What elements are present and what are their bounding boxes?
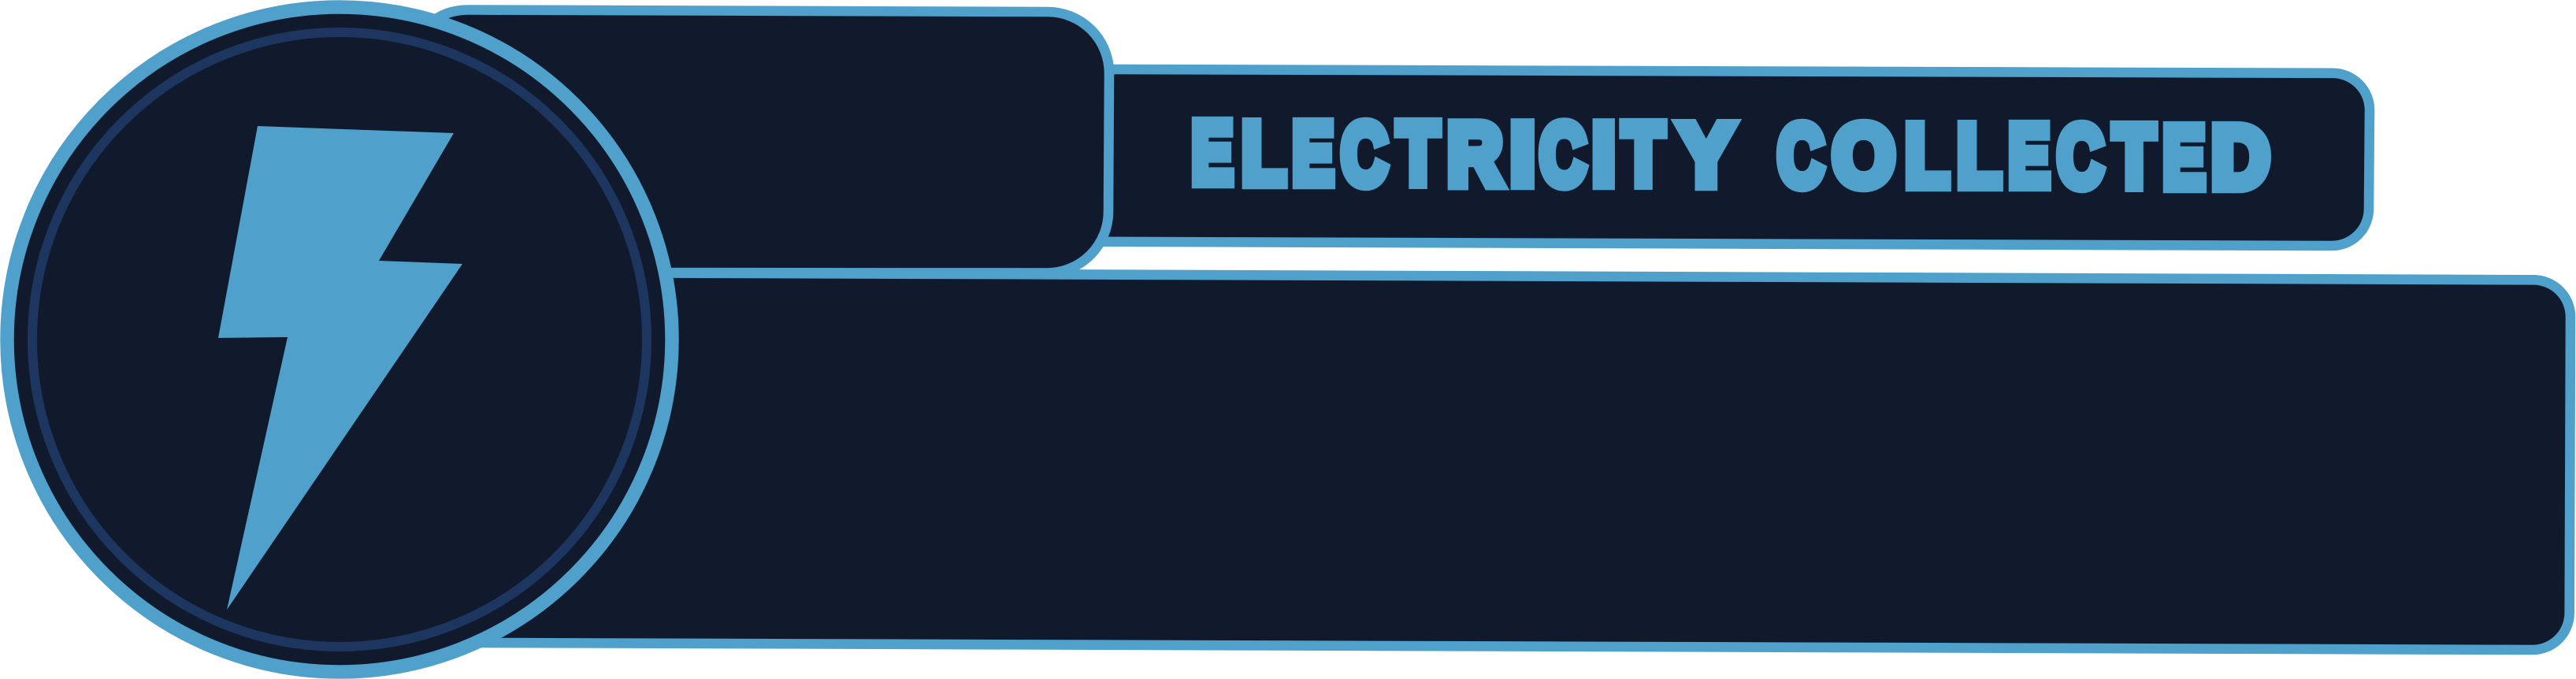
panel: title bar [1024, 69, 2370, 246]
title: electricity collected: R [1448, 106, 1502, 203]
title: electricity collected: T [2114, 108, 2155, 206]
title: electricity collected: T [1397, 105, 1438, 202]
title: electricity collected: E [1293, 105, 1334, 202]
icon: lightning bolt [218, 126, 462, 610]
icon badge: circle with lightning bolt [7, 7, 672, 672]
title: electricity collected: C [1342, 106, 1387, 203]
title: electricity collected: C [1778, 107, 1824, 205]
title: electricity collected: E [2009, 107, 2050, 205]
title: electricity collected: L [1957, 107, 2001, 205]
title: electricity collected: L [1905, 107, 1949, 205]
badge outer circle [7, 7, 672, 672]
title: electricity collected: T [1623, 106, 1664, 203]
title: electricity collected: I [1592, 106, 1615, 203]
title: electricity collected: L [1242, 105, 1286, 202]
title: electricity collected: D [2211, 109, 2270, 206]
title: electricity collected: O [1832, 107, 1895, 205]
title: electricity collected [1192, 104, 2270, 206]
title: electricity collected: E [1192, 104, 1233, 202]
title: electricity collected: C [1540, 106, 1586, 204]
badge inner ring [32, 32, 647, 647]
title: electricity collected: C [2058, 108, 2103, 206]
panel: top left tab [410, 9, 1109, 273]
panel: large content panel [441, 273, 2570, 650]
title: electricity collected: Y [1679, 106, 1734, 204]
title: electricity collected: E [2163, 109, 2205, 206]
title: electricity collected: I [1510, 106, 1535, 203]
